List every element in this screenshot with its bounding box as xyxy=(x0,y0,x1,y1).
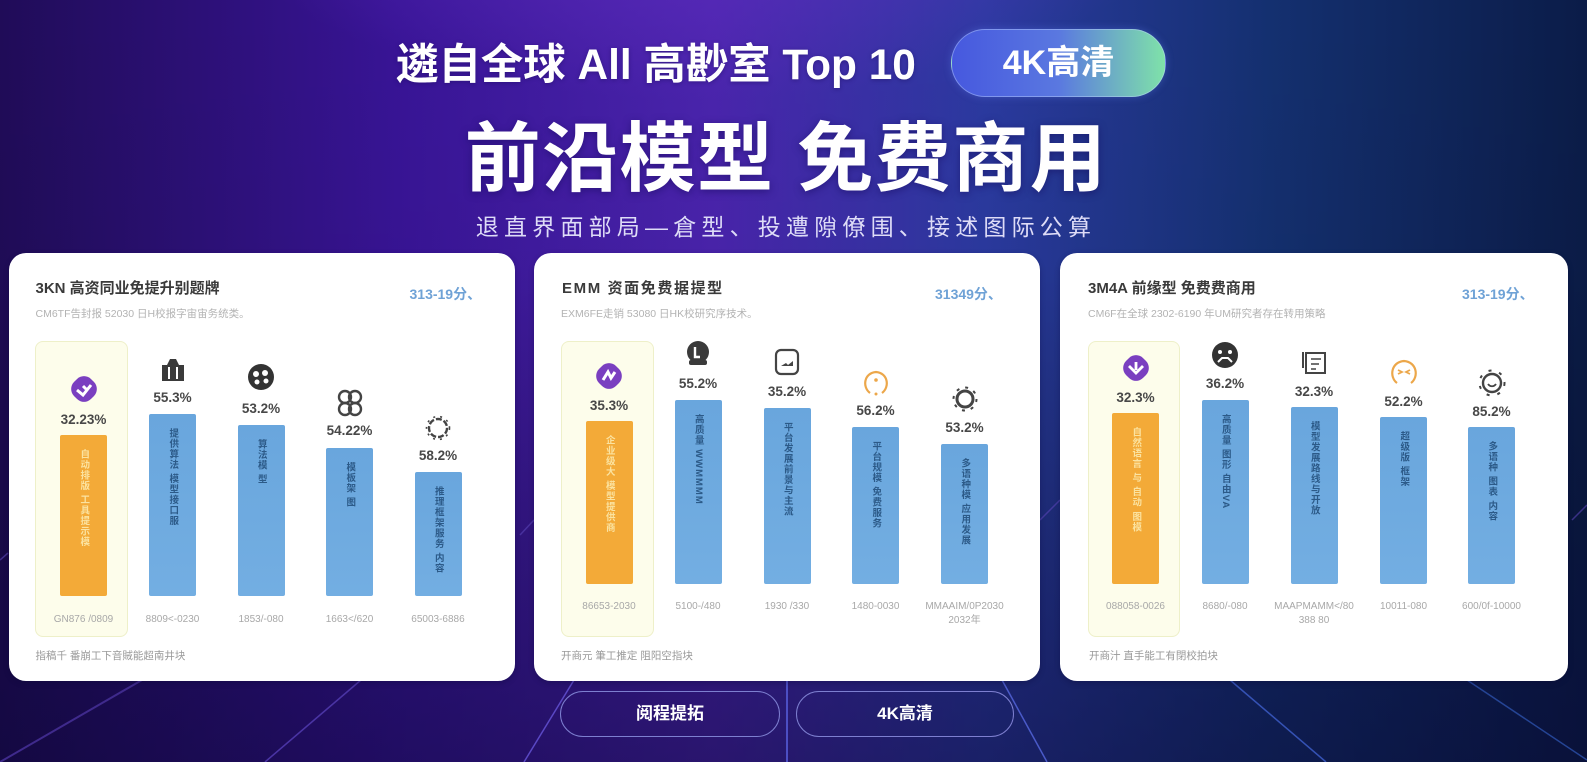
badge: 4K: 4K高清 xyxy=(1003,44,1114,82)
bar xyxy=(1112,413,1159,584)
percent: 58.2% xyxy=(419,448,457,463)
card 2 highlight box xyxy=(561,341,654,637)
icon: outline document xyxy=(1302,352,1326,374)
card 1 title: 3KN 高资同业免提升别题牌 xyxy=(36,280,220,297)
bar xyxy=(852,427,899,584)
percent: 55.3% xyxy=(153,390,192,405)
label: 8809<-0230 xyxy=(146,614,199,625)
label: 088058-0026 xyxy=(1106,601,1165,612)
card 3 column 5 xyxy=(1462,370,1521,612)
subtitle: 退直界面部局—倉型、投遭隙僚围、接述图际公算 xyxy=(476,214,1096,240)
bar: 算法模 型 xyxy=(256,439,267,485)
card 2 column 1 xyxy=(582,363,636,612)
card 2 score: 31349分、 xyxy=(935,286,1002,302)
bar: 自然语言 与 自动 图模 xyxy=(1130,427,1141,532)
heading: top line: 遴自全球 All 高尠室 Top 10 xyxy=(396,41,916,88)
label: 1480-0030 xyxy=(852,601,899,612)
card 3 title: 3M4A 前缘型 免费费商用 xyxy=(1088,280,1256,297)
badge: 4K xyxy=(951,29,1166,97)
card 1 highlight box xyxy=(35,341,128,637)
bar: 多语种模 应用发展 xyxy=(959,458,970,546)
card 2 column 5 xyxy=(925,386,1004,626)
card 1 description: CM6TF告封报 52030 日H校报字宙宙务统类。 xyxy=(36,308,250,320)
bar: 平台规模 免费服务 xyxy=(870,441,881,529)
card 2 column 4 xyxy=(852,370,899,612)
label: 5100-/480 xyxy=(675,601,721,612)
card 3 footnote: 开商汁 直手能工有閉校拍块 xyxy=(1089,650,1218,662)
bar xyxy=(1380,417,1427,584)
label: 1663</620 xyxy=(326,614,373,625)
percent: 32.3% xyxy=(1116,390,1155,405)
bar xyxy=(674,400,722,584)
label: 600/0f-10000 xyxy=(1462,601,1521,612)
label: GN876 /0809 xyxy=(54,614,113,625)
card 3 description: CM6F在全球 2302-6190 年UM研究者存在转用策略 xyxy=(1088,308,1325,320)
bar xyxy=(941,444,988,584)
card 1 column 1 xyxy=(54,376,113,625)
bar: 提供算法 模型接口服 xyxy=(167,428,178,526)
card 3 column 4 xyxy=(1380,360,1427,612)
bar: 高质量 图形 自由VA xyxy=(1220,414,1231,509)
percent: 32.3% xyxy=(1295,384,1333,399)
icon: dark cap xyxy=(162,359,184,381)
label: 1853/-080 xyxy=(238,614,284,625)
card 1 footnote: 指稿千 番崩工下音賊能超南井块 xyxy=(36,650,185,662)
bar: 自动排版 工具提示模 xyxy=(78,449,89,547)
card 2 column 2 xyxy=(675,341,722,612)
percent: 36.2% xyxy=(1206,376,1244,391)
icon: outline frame xyxy=(774,348,800,376)
icon: purple badge xyxy=(71,376,97,402)
button: 4K: 4K高清 xyxy=(877,704,933,723)
icon: outline gear face xyxy=(1478,370,1506,396)
bar xyxy=(149,414,196,596)
card 1 column 3 xyxy=(238,364,285,625)
icon: purple badge xyxy=(1123,355,1149,381)
label: 388 80 xyxy=(1299,615,1329,626)
bar: 平台发展前景与主流 xyxy=(782,422,793,516)
icon: orange face xyxy=(1391,360,1417,384)
card 2 column 3 xyxy=(764,348,811,612)
button: left xyxy=(560,691,780,737)
card 3 column 1 xyxy=(1106,355,1165,612)
bar: 推理框架服务 内容 xyxy=(433,486,444,574)
card 2 title: EMM 资面免费据提型 xyxy=(562,280,724,297)
card 1 column 5 xyxy=(411,416,465,625)
icon: dark cap xyxy=(687,341,709,365)
label xyxy=(925,601,1004,626)
card 2 description: EXM6FE走销 53080 日HK校研究序技术。 xyxy=(561,308,758,320)
percent: 53.2% xyxy=(242,401,280,416)
bar: 模型发展路线与开放 xyxy=(1309,421,1320,516)
label: 2032年 xyxy=(948,615,981,626)
label xyxy=(1274,601,1354,626)
bar xyxy=(586,421,632,584)
percent: 85.2% xyxy=(1472,404,1511,419)
label: 1930 /330 xyxy=(765,601,809,612)
icon: dark face xyxy=(1212,342,1238,368)
main title: 前沿模型 免费商用 xyxy=(465,117,1107,202)
card 1 column 2 xyxy=(146,359,199,625)
card 1 column 4 xyxy=(326,390,373,625)
icon: outline knot xyxy=(338,390,362,416)
card 3 column 3 xyxy=(1274,352,1354,626)
bar xyxy=(238,425,284,596)
bar xyxy=(1468,427,1515,584)
label: 10011-080 xyxy=(1380,601,1427,612)
card 3 score: 313-19分、 xyxy=(1462,286,1534,302)
panel: card 2 xyxy=(534,253,1040,681)
button: 4K xyxy=(796,691,1014,737)
percent: 35.2% xyxy=(768,384,806,399)
bar xyxy=(764,408,810,584)
label: 8680/-080 xyxy=(1202,601,1248,612)
label: 86653-2030 xyxy=(582,601,636,612)
bar: 模板架 图 xyxy=(344,462,355,508)
label: MAAPMAMM</80 xyxy=(1274,601,1354,612)
bar: 企业级大 模型提供商 xyxy=(604,435,615,533)
bar xyxy=(326,448,373,596)
icon: outline gear xyxy=(952,386,978,412)
label: 65003-6886 xyxy=(411,614,465,625)
bar: 超级版 框架 xyxy=(1398,431,1409,487)
icon: orange outline xyxy=(864,370,888,396)
percent: 56.2% xyxy=(856,403,895,418)
percent: 54.22% xyxy=(327,423,372,438)
percent: 35.3% xyxy=(590,398,628,413)
percent: 53.2% xyxy=(945,420,984,435)
percent: 55.2% xyxy=(679,376,717,391)
button: left: 阅程提拓 xyxy=(636,704,704,723)
card 3 highlight box xyxy=(1088,341,1180,637)
bar: 多语种 图表 内容 xyxy=(1486,441,1497,522)
bar xyxy=(60,435,107,596)
bar xyxy=(1202,400,1248,584)
card 3 column 2 xyxy=(1202,342,1249,612)
percent: 32.23% xyxy=(61,412,106,427)
card 1 score: 313-19分、 xyxy=(410,286,481,302)
card 2 footnote: 开商元 筆工推定 阻阳空指块 xyxy=(561,650,693,662)
bar xyxy=(414,472,462,596)
bar xyxy=(1290,407,1338,584)
icon: purple badge xyxy=(596,363,622,389)
percent: 52.2% xyxy=(1384,394,1423,409)
icon: outline gear xyxy=(426,416,450,440)
panel: card 1 xyxy=(8,253,514,681)
bar: 高质量 WWMMMM xyxy=(693,414,704,505)
panel: card 3 xyxy=(1060,253,1568,681)
label: MMAAIM/0P2030 xyxy=(925,601,1004,612)
icon: dark circle xyxy=(248,364,274,390)
